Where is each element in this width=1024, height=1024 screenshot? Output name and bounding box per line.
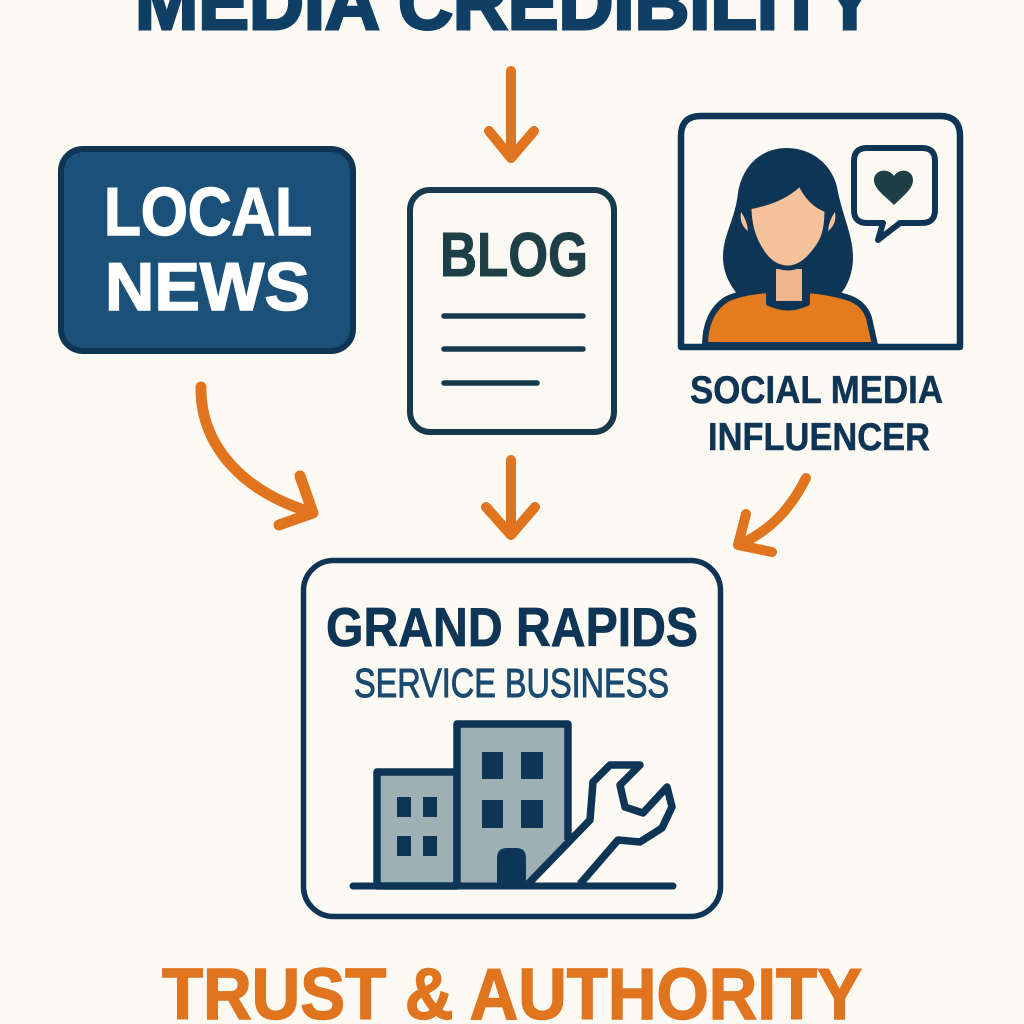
arrow: local news to business xyxy=(201,387,313,525)
business heading: GRAND RAPIDS xyxy=(326,596,698,658)
blog text lines xyxy=(444,316,583,383)
panel: grand rapids service business xyxy=(304,560,720,916)
arrow: title to blog xyxy=(489,71,534,158)
influencer video frame xyxy=(681,116,960,347)
influencer label: SOCIAL MEDIA xyxy=(690,369,943,412)
panel: local news xyxy=(61,149,353,351)
local news label: LOCAL xyxy=(104,174,312,250)
icon: buildings and wrench xyxy=(353,724,673,886)
arrow: influencer to business xyxy=(738,478,806,552)
panel: social media influencer xyxy=(681,116,960,459)
business subheading: SERVICE BUSINESS xyxy=(354,660,669,706)
local news label xyxy=(104,174,312,325)
arrow: blog to business xyxy=(486,460,535,535)
icon: speech bubble with heart xyxy=(854,148,935,240)
influencer label xyxy=(690,369,943,459)
influencer label: INFLUENCER xyxy=(708,416,930,459)
icon: influencer portrait xyxy=(705,148,875,345)
blog label: BLOG xyxy=(440,221,588,290)
panel: blog document xyxy=(410,190,614,432)
local news label: NEWS xyxy=(105,249,310,325)
